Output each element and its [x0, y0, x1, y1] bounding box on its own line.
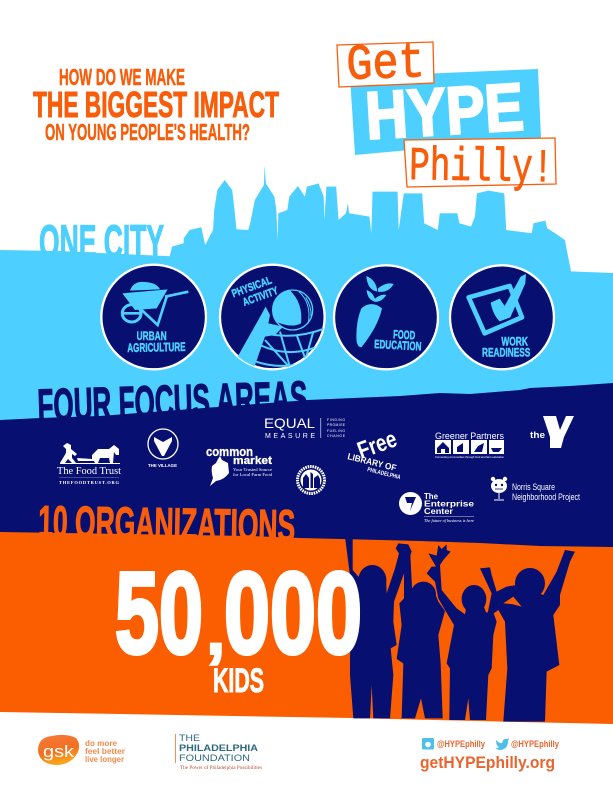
band: light blue — [0, 250, 613, 425]
circle: physical activity — [220, 265, 325, 373]
social handles and website — [420, 738, 559, 772]
circle: food education: EDUCATION — [374, 337, 422, 353]
logo: Equal Measure: MEASURE — [265, 433, 315, 440]
logo: Get HYPE Philly: Philly! — [409, 141, 554, 197]
heading: how do we make the biggest impact: THE BIGGEST IMPACT — [33, 84, 279, 125]
logo: Greener Partners — [435, 431, 504, 459]
logo: Equal Measure: CHANGE — [327, 434, 346, 438]
label: kids: KIDS — [213, 662, 264, 700]
logo: Equal Measure: FINDING — [327, 418, 345, 422]
circle: work readiness: WORK — [501, 335, 528, 349]
social handles and website: @HYPEphilly — [437, 739, 485, 749]
logo: Common Market: market — [233, 455, 272, 467]
social handles and website: @HYPEphilly — [511, 739, 559, 749]
logo: Common Market: for Local Farm Food — [233, 472, 273, 477]
band: orange — [0, 532, 613, 724]
logo: The Food Trust: The Food Trust — [57, 465, 121, 477]
icon: instagram — [422, 738, 434, 750]
logo: The Philadelphia Foundation — [175, 733, 262, 771]
heading: one city: ONE CITY — [39, 215, 164, 268]
silhouette: kids — [345, 537, 575, 722]
logo: Equal Measure: FUELING — [327, 429, 345, 433]
logo: The Philadelphia Foundation: The Power of Philadelphia Possibilities — [180, 764, 262, 771]
circle: work readiness — [450, 265, 554, 369]
circle: food education: FOOD — [393, 327, 416, 342]
logo: Free Library of Philadelphia: PHILADELPHIA — [367, 467, 401, 481]
heading: how do we make the biggest impact — [33, 64, 279, 145]
logo: Common Market: common — [206, 444, 253, 459]
logo: Equal Measure: EQUAL — [264, 415, 315, 431]
circle: physical activity: ACTIVITY — [241, 285, 280, 309]
logo: The Enterprise Center: The — [424, 492, 439, 501]
logo: The Philadelphia Foundation: PHILADELPHIA — [179, 743, 258, 754]
circle: urban agriculture: URBAN — [137, 329, 167, 343]
big number: 50,000: , — [206, 591, 225, 669]
circle: work readiness: READINESS — [482, 346, 530, 360]
big number: 50,000: 50 — [115, 548, 203, 678]
logo: The Village: THE VILLAGE — [148, 463, 177, 468]
logo: Norris Square Neighborhood Project — [491, 477, 580, 502]
circle: food education — [334, 265, 438, 369]
logo: The Enterprise Center — [399, 492, 475, 523]
circle: urban agriculture — [101, 265, 206, 369]
logo: Greener Partners: Connecting communities through food and farm education — [435, 455, 504, 459]
logo: The Philadelphia Foundation: FOUNDATION — [179, 753, 250, 764]
icon: twitter bird — [495, 738, 509, 750]
heading: four focus areas: FOUR FOCUS AREAS — [37, 371, 308, 432]
logo: The Enterprise Center: Enterprise — [424, 500, 475, 508]
logo: Get HYPE Philly — [337, 35, 556, 197]
focus area circles — [101, 265, 325, 373]
logo: Get HYPE Philly: HYPE — [363, 69, 526, 154]
logo: Common Market: Your Trusted Source — [233, 467, 272, 472]
heading: 10 organizations: 10 ORGANIZATIONS — [38, 496, 296, 551]
logo: the Y: the — [530, 430, 545, 440]
logo: GSK: do more — [85, 739, 118, 748]
logo: The Enterprise Center: Center — [424, 507, 453, 516]
band: navy — [0, 383, 613, 560]
logo: the Y — [530, 416, 574, 448]
logo: Greener Partners: Greener Partners — [435, 431, 504, 441]
social handles and website: getHYPEphilly.org — [420, 754, 555, 772]
logo: The Village — [148, 429, 178, 468]
logo: Get HYPE Philly: Get — [346, 35, 426, 95]
logo: Equal Measure — [264, 415, 346, 440]
logo: GSK: gsk — [43, 742, 75, 761]
logo: Free Library of Philadelphia: LIBRARY OF — [347, 451, 398, 473]
big number: 50,000: 000 — [224, 548, 362, 678]
heading: how do we make the biggest impact: HOW DO WE MAKE — [59, 64, 185, 90]
logo: Equal Measure: PROMISE — [327, 423, 346, 427]
logo: The Enterprise Center: The future of business is here — [424, 518, 474, 523]
logo: The Philadelphia Foundation: THE — [179, 733, 200, 744]
big number: 50,000 — [115, 548, 362, 678]
logo: Free Library of Philadelphia — [347, 426, 401, 481]
circle: physical activity: PHYSICAL — [230, 275, 274, 300]
heading: how do we make the biggest impact: ON YOUNG PEOPLE'S HEALTH? — [45, 119, 250, 145]
logo: The Food Trust — [57, 443, 121, 485]
logo: Common Market — [206, 444, 273, 486]
skyline — [169, 165, 575, 287]
logo: The Food Trust: THEFOODTRUST.ORG — [59, 480, 119, 485]
logo: neighborhood circle — [298, 466, 324, 494]
logo: Norris Square Neighborhood Project: Neighborhood Project — [512, 492, 580, 502]
circle: urban agriculture: AGRICULTURE — [127, 340, 186, 355]
logo: GSK — [38, 735, 125, 765]
logo: Free Library of Philadelphia: Free — [354, 426, 401, 465]
logo: Norris Square Neighborhood Project: Norris Square — [512, 482, 555, 492]
logo: GSK: live longer — [85, 755, 124, 764]
logo: GSK: feel better — [85, 747, 125, 756]
